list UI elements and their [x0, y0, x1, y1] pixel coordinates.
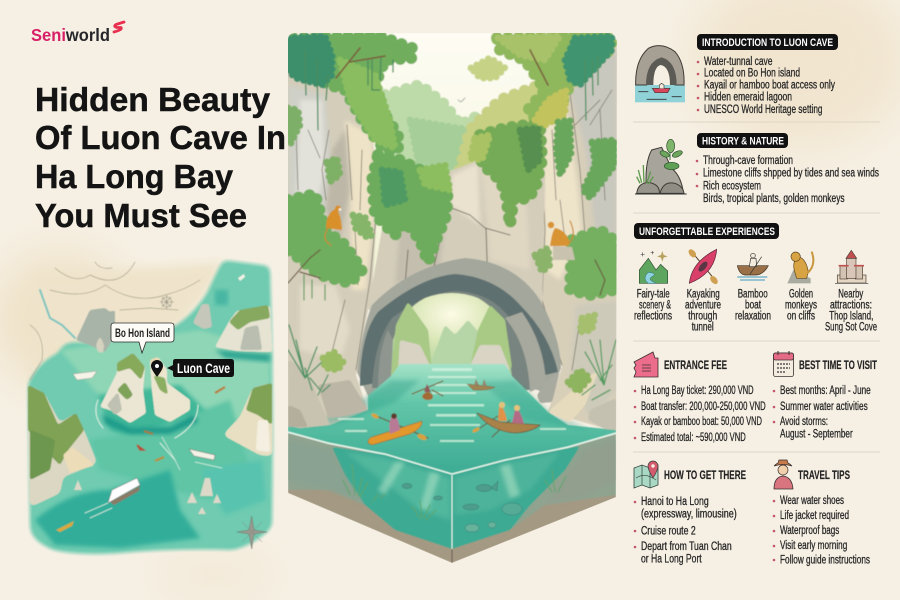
map of Ha Long Bay — [28, 260, 273, 554]
list: best time: Summer water activities — [780, 401, 868, 413]
canopy top left — [288, 36, 412, 150]
golden monkey right — [548, 221, 573, 246]
bullet list: history: Rich ecosystem — [703, 180, 761, 192]
map water — [28, 260, 273, 554]
icon: golden monkey — [787, 252, 813, 283]
label: kayaking adventure — [685, 289, 721, 333]
panel: how to get there — [634, 461, 746, 565]
cruise boats — [108, 478, 140, 503]
icon: calendar — [774, 351, 794, 376]
left large island — [28, 385, 97, 507]
icon: ticket — [634, 352, 658, 377]
label: golden monkeys: monkeys — [785, 300, 817, 312]
bullet list: introduction — [697, 56, 835, 116]
panel: unforgettable experiences — [634, 223, 877, 333]
central illustration: cave cross-section — [286, 33, 617, 563]
label: kayaking adventure: through — [688, 310, 717, 322]
bullet list: introduction: Water-tunnal cave — [704, 56, 772, 68]
upper right island — [215, 350, 270, 362]
Bo Hon island right peak — [150, 357, 190, 422]
panel: travel tips — [773, 460, 870, 566]
title — [35, 81, 286, 234]
map pin — [151, 360, 163, 377]
label: nearby attractions: Thop Island, — [829, 310, 873, 322]
small rocks — [74, 478, 221, 514]
small kayak — [412, 381, 443, 400]
small north island — [193, 304, 212, 329]
label: fairy-tale scenery: scenery & — [639, 300, 671, 312]
map small compass top — [160, 295, 174, 309]
bullet list: introduction: Located on Bo Hon island — [704, 68, 800, 80]
sky — [296, 33, 617, 274]
right cliff — [540, 40, 617, 432]
list: how to get there: (expressway, limousine) — [641, 509, 737, 521]
label: golden monkeys: on cliffs — [787, 310, 815, 322]
label: Luon Cave — [167, 359, 234, 377]
logo: Seniworld: Seniworld — [31, 25, 110, 45]
icon: fairy-tale scenery — [639, 251, 668, 283]
icon: nearby attractions — [835, 250, 868, 283]
lagoon ring — [96, 400, 198, 460]
list: entrance fee: Kayak or bamboo boat: 50,000 VND — [641, 416, 762, 428]
icon: kayak — [687, 248, 719, 285]
list: travel tips: Waterproof bags — [780, 525, 839, 537]
label: bamboo boat: boat — [745, 300, 762, 312]
lagoon surface — [288, 364, 616, 474]
back island — [76, 308, 115, 352]
wooden boat — [472, 402, 540, 437]
map compass rose — [237, 516, 267, 549]
label: nearby attractions: Nearby — [838, 289, 863, 301]
bullet list: history — [696, 155, 879, 205]
badge: introduction — [697, 34, 838, 50]
badge: history and nature — [697, 133, 788, 148]
list: best time: August - September — [780, 429, 853, 441]
list: entrance fee: Ha Long Bay ticket: 290,000 VND — [641, 385, 754, 397]
badge: unforgettable experiences: UNFORGETTABLE EXPERIENCES — [639, 226, 775, 238]
list: how to get there — [634, 496, 737, 565]
label: fairy-tale scenery: Fairy-tale — [637, 289, 670, 301]
label: bamboo boat — [735, 289, 771, 322]
label: fairy-tale scenery — [634, 289, 672, 322]
right column — [633, 34, 880, 566]
bullet list: history: Birds, tropical plants, golden monkeys — [703, 193, 845, 205]
label: Bo Hon Island: Bo Hon Island — [115, 326, 170, 340]
label: golden monkeys: Golden — [789, 289, 813, 301]
badge: history and nature: HISTORY & NATURE — [702, 136, 784, 148]
label: Luon Cave: Luon Cave — [177, 360, 230, 376]
bird — [458, 98, 465, 102]
list: travel tips: Life jacket required — [780, 510, 849, 522]
central rock above arch — [368, 160, 545, 310]
label: kayaking adventure: Kayaking — [687, 289, 720, 301]
canopy top right — [497, 35, 612, 122]
kayaks — [56, 521, 74, 532]
icon: cave with boat — [635, 46, 685, 102]
icon: traveller with hat — [774, 460, 793, 489]
distant foliage — [385, 58, 545, 180]
map land wash — [30, 262, 225, 383]
label: Bo Hon Island — [111, 323, 174, 353]
wake — [85, 437, 222, 518]
list: how to get there: or Ha Long Port — [641, 553, 702, 565]
small boat — [467, 379, 495, 390]
list: how to get there: Hanoi to Ha Long — [641, 496, 709, 508]
list: entrance fee — [634, 385, 766, 444]
panel: introduction to Luon Cave — [635, 34, 838, 116]
lower foliage clumps — [288, 108, 615, 300]
panel: entrance fee — [634, 352, 766, 444]
list: how to get there: Cruise route 2 — [641, 525, 696, 537]
cave arch — [357, 258, 561, 396]
title: Hidden Beauty — [35, 81, 271, 118]
kayak left — [368, 412, 428, 445]
Bo Hon island left peak — [100, 353, 146, 423]
label: golden monkeys — [785, 289, 817, 322]
list: travel tips — [773, 495, 870, 566]
golden monkey left — [325, 206, 342, 245]
bullet list: introduction: UNESCO World Heritage setting — [704, 104, 822, 116]
label: kayaking adventure: tunnel — [692, 321, 714, 333]
label: fairy-tale scenery: reflections — [634, 310, 672, 322]
list: entrance fee: Estimated total: ~590,000 VND — [641, 432, 746, 444]
badge: unforgettable experiences — [634, 223, 779, 239]
icon: rock with plant — [635, 139, 687, 194]
list: travel tips: Visit early morning — [780, 540, 847, 552]
right middle island — [223, 383, 272, 456]
title: Of Luon Cave In — [35, 119, 286, 156]
list: best time — [773, 385, 871, 441]
label: nearby attractions — [825, 289, 877, 333]
panel: history and nature — [635, 133, 879, 205]
list: best time: Avoid storms: — [780, 416, 828, 428]
foreground rocks and plants — [288, 315, 616, 430]
map topo lines — [30, 262, 200, 380]
heading: travel tips: TRAVEL TIPS — [798, 470, 850, 482]
bullet list: introduction: Kayail or hamboo boat access only — [704, 80, 835, 92]
heading: entrance fee: ENTRANCE FEE — [664, 360, 727, 372]
bullet list: introduction: Hidden emeraid lagoon — [704, 92, 792, 104]
bullet list: history: Through-cave formation — [703, 155, 793, 167]
left cliff — [286, 60, 378, 432]
title: You Must See — [35, 197, 247, 234]
title: Ha Long Bay — [35, 158, 234, 195]
light rays — [378, 462, 520, 510]
lagoon shadow — [102, 414, 198, 434]
heading: how to get there: HOW TO GET THERE — [664, 470, 746, 482]
label: kayaking adventure: adventure — [685, 300, 721, 312]
underwater cross-section — [288, 433, 616, 563]
icon: bamboo boat — [737, 253, 768, 280]
icon: folded map with pin — [634, 461, 658, 488]
panel: best time to visit — [773, 351, 877, 441]
view through arch — [391, 293, 512, 378]
label: bamboo boat: Bamboo — [738, 289, 768, 301]
hanging foliage centre — [372, 90, 566, 262]
list: entrance fee: Boat transfer: 200,000-250,000 VND — [641, 401, 766, 413]
label: bamboo boat: relaxation — [735, 310, 771, 322]
list: travel tips: Wear water shoes — [780, 495, 844, 507]
label: nearby attractions: attractions: — [830, 300, 872, 312]
underwater plants and fish — [343, 465, 566, 520]
list: how to get there: Depart from Tuan Chan — [641, 541, 732, 553]
badge: introduction: INTRODUCTION TO LUON CAVE — [702, 37, 833, 49]
